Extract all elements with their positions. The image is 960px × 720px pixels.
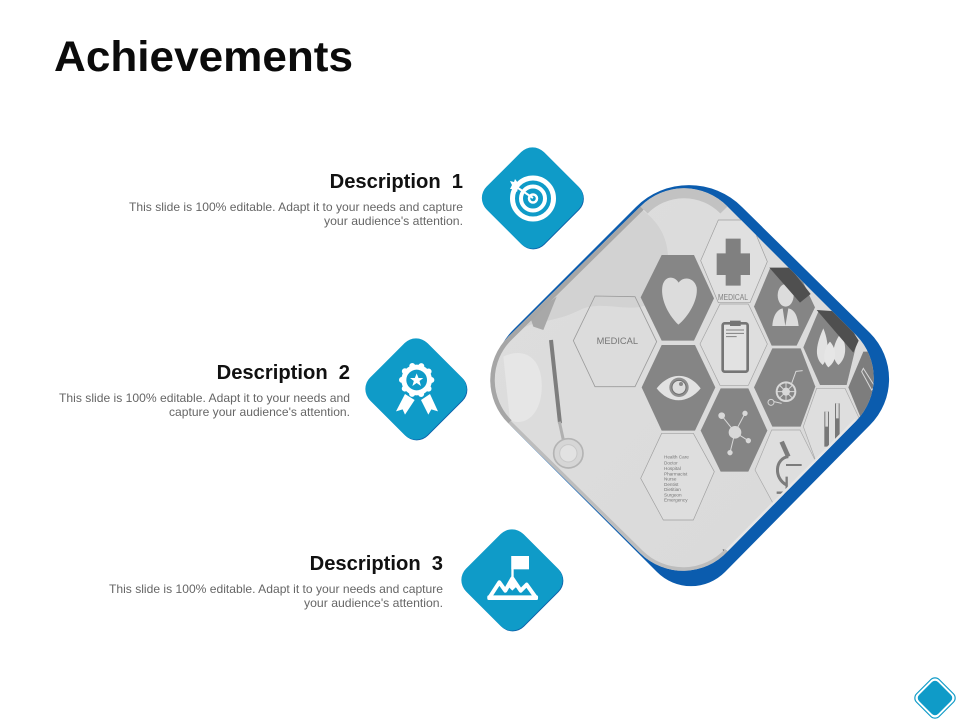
body text: description 2: This slide is 100% editable. Adapt it to your needs and (59, 391, 350, 405)
body text: description 3: your audience's attention. (304, 596, 443, 610)
description block 1 (129, 171, 463, 228)
hexagon: list: Emergency (664, 498, 688, 503)
description block 3 (109, 553, 443, 610)
hexagon: clipboard (700, 304, 767, 385)
hexagon: person (754, 268, 815, 346)
hexagon: wheelchair (754, 348, 815, 427)
hexagon: far right device (848, 352, 874, 416)
body text: description 2: capture your audience's attention. (169, 405, 350, 419)
icon: award ribbon diamond (359, 332, 474, 447)
heading: description 1: Description 1 (330, 171, 463, 193)
hexagon: list: Nurse (664, 477, 677, 482)
body text: description 3: This slide is 100% editable. Adapt it to your needs and capture (109, 582, 443, 596)
body text: description 2 (59, 391, 350, 419)
photo bevel edge (490, 188, 856, 571)
hexagon: list: Dentist (664, 482, 679, 487)
hexagon: list: Health Care (664, 455, 689, 460)
hexagon: molecule (701, 388, 767, 472)
photo panel: medical hexagons (490, 188, 874, 571)
photo: stethoscope (551, 340, 583, 468)
hexagon: list: Pharmacist (664, 471, 688, 476)
heading: description 2: Description 2 (217, 362, 350, 384)
hexagon: list: Doctor (664, 461, 678, 466)
hexagon: heart (641, 255, 714, 341)
navigation diamond button (912, 675, 958, 720)
blue rounded diamond backing (493, 185, 889, 586)
body text: description 3 (109, 582, 443, 610)
hexagon: list: Hospital (664, 466, 681, 471)
dark photo wedges (723, 268, 859, 563)
body text: description 1 (129, 200, 463, 228)
hexagon: cross (701, 220, 767, 303)
heading: description 3: Description 3 (310, 553, 443, 575)
hexagon: medical label: MEDICAL (597, 336, 638, 346)
hexagon: list: Dietitian (664, 487, 681, 492)
hexagon: list (641, 433, 714, 520)
hexagon: eye (642, 345, 715, 431)
description block 2 (59, 362, 350, 419)
photo: coat shading (503, 207, 668, 422)
hexagon: cross: MEDICAL (718, 293, 748, 302)
icon: target diamond (475, 141, 590, 256)
hexagon: test tubes (803, 388, 860, 463)
hexagon: list: Surgeon (664, 492, 682, 497)
body text: description 1: your audience's attention. (324, 214, 463, 228)
hexagon: flames (803, 312, 857, 385)
title: Achievements (54, 33, 353, 81)
body text: description 1: This slide is 100% editable. Adapt it to your needs and capture (129, 200, 463, 214)
hexagon: microscope (755, 430, 817, 510)
hexagon: medical label (573, 296, 657, 387)
icon: mountain flag diamond (455, 523, 570, 638)
